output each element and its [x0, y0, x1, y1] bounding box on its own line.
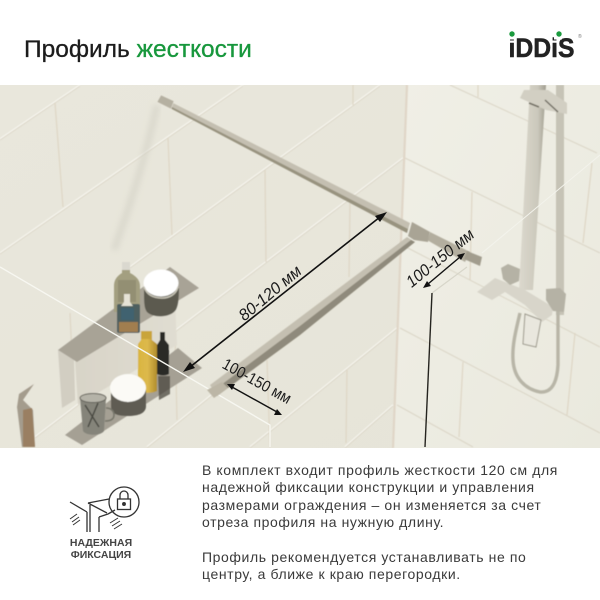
- description text: В комплект входит профиль жесткости 120 см для: [202, 462, 558, 478]
- bracket shadow: [529, 100, 558, 112]
- lever handle: [523, 314, 541, 347]
- label: 100-150 mm right: 100-150 мм: [403, 226, 478, 291]
- tool on left wall: [17, 384, 35, 447]
- icon: secure fixation: НАДЕЖНАЯ: [70, 537, 132, 549]
- shelf back panel: [75, 300, 177, 405]
- jar: upper: [144, 270, 179, 316]
- faucet body: [477, 278, 553, 322]
- hose: [513, 310, 558, 392]
- logo: iddis: iDDiS: [508, 33, 574, 63]
- description text: размерами ограждения – он изменяется за счет: [202, 497, 541, 513]
- upper shelf: [58, 267, 199, 362]
- bottle: black: [157, 332, 170, 400]
- glass tumbler: [80, 394, 114, 435]
- glass shadow: [114, 105, 157, 250]
- bracket: [520, 90, 567, 114]
- rail: [519, 85, 546, 290]
- arrow: 100-150 bottom: [227, 384, 282, 415]
- description text: надежной фиксации конструкции и управления: [202, 479, 535, 495]
- knob left: [501, 264, 520, 285]
- description text: центру, а ближе к краю перегородки.: [202, 566, 461, 582]
- icon: secure fixation: [70, 486, 140, 561]
- bottle: yellow: [138, 331, 157, 393]
- shower column: [477, 85, 567, 392]
- shelves and toiletries: [58, 262, 202, 445]
- title: Профиль жесткости: [24, 36, 252, 63]
- bottle: dropper: [117, 294, 140, 333]
- profile: second bar: [207, 237, 415, 398]
- label: 100-150 mm bottom: 100-150 мм: [219, 356, 294, 408]
- wall clamp top: [157, 95, 174, 109]
- lower shelf: [65, 348, 202, 445]
- profile: main bar: [157, 95, 470, 262]
- description text: Профиль рекомендуется устанавливать не по: [202, 549, 526, 565]
- icon: secure fixation: ФИКСАЦИЯ: [71, 549, 131, 561]
- bottle: clear oil: [114, 262, 140, 312]
- label: 80-120 mm: 80-120 мм: [235, 262, 305, 325]
- photo: shower enclosure with stiffening profile: [0, 85, 600, 448]
- end cap: [464, 251, 482, 266]
- arrow: 80-120: [183, 212, 387, 372]
- pipe: [556, 85, 564, 315]
- arrow: 100-150 right: [423, 253, 465, 288]
- logo: iddis: ®: [578, 33, 582, 40]
- t-connector: [408, 222, 430, 242]
- knob right: [546, 288, 566, 312]
- description text: отреза профиля на нужную длину.: [202, 514, 444, 530]
- description text: [202, 462, 558, 582]
- floor clamp: [207, 382, 228, 398]
- jar: lower: [110, 374, 146, 416]
- wall tiles: [0, 85, 600, 448]
- icon: lock circle: [109, 487, 139, 517]
- shelf side panel: [58, 350, 75, 408]
- glass edges: [0, 155, 600, 447]
